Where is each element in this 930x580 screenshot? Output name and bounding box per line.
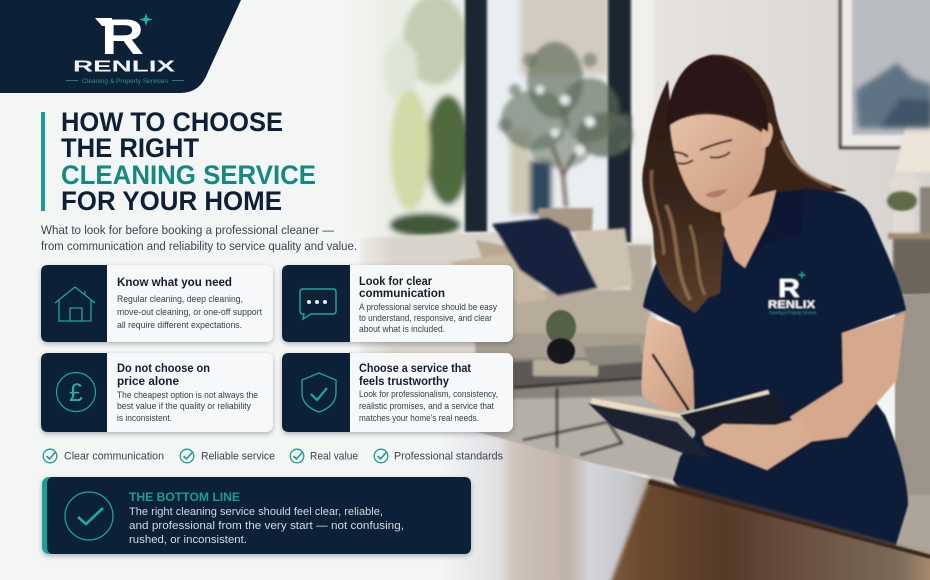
vase plant <box>546 310 576 364</box>
side cabinet <box>888 233 930 295</box>
side plant <box>887 191 917 234</box>
wall art <box>839 0 930 149</box>
card text: matches your home's real needs. <box>359 413 479 424</box>
logo wordmark: RENLIX <box>73 58 176 76</box>
notebook <box>588 390 788 457</box>
armchair <box>895 293 930 560</box>
callout text: and professional from the very start — not confusing, <box>129 520 404 532</box>
pen <box>653 355 688 409</box>
hair back <box>660 55 847 225</box>
left arm <box>642 317 697 414</box>
check: real value: Real value <box>310 450 358 462</box>
olive tree <box>498 42 633 207</box>
card text <box>359 274 497 335</box>
logo tagline: Cleaning & Property Services <box>82 78 168 85</box>
subtitle: What to look for before booking a professional cleaner — <box>41 223 335 237</box>
wooden table foreground <box>345 396 930 580</box>
panel: do not choose on price alone <box>41 353 273 432</box>
card text: Do not choose on <box>117 361 210 375</box>
card text: Look for professionalism, consistency, <box>359 389 498 400</box>
subtitle <box>41 223 357 253</box>
card text: feels trustworthy <box>359 374 449 388</box>
logo tagline <box>66 78 184 85</box>
callout text: THE BOTTOM LINE <box>129 492 240 504</box>
shirt logo: R <box>778 273 800 303</box>
panel: look for clear communication <box>282 265 513 342</box>
title block: THE RIGHT <box>61 133 199 163</box>
hair highlights <box>651 140 832 300</box>
icon: pound coin <box>56 372 96 412</box>
shirt logo: Cleaning & Property Services <box>769 310 817 315</box>
card text: price alone <box>117 374 179 388</box>
art mountains <box>856 63 930 128</box>
card text: best value if the quality or reliability <box>117 401 251 412</box>
icon: check circle <box>65 492 113 540</box>
check: reliable service <box>180 449 275 463</box>
rug <box>470 358 695 485</box>
logo sparkle <box>139 13 153 26</box>
logo panel <box>0 0 241 93</box>
card text <box>117 361 258 424</box>
photo: living room background <box>340 0 930 560</box>
card text <box>359 361 498 424</box>
check: clear communication: Clear communication <box>64 450 164 462</box>
title block: CLEANING SERVICE <box>61 160 316 190</box>
face <box>670 115 773 212</box>
panel: know what you need <box>41 265 273 342</box>
hand over book <box>702 418 812 470</box>
subtitle: from communication and reliability to service quality and value. <box>41 239 357 253</box>
panel: choose a service that feels trustworthy <box>282 353 513 432</box>
left white fade over photo <box>0 0 395 580</box>
title block <box>41 107 316 216</box>
photo: woman writing in notebook <box>588 55 908 548</box>
check: real value <box>290 449 358 463</box>
checklist row <box>43 449 503 463</box>
card text: about what is included. <box>359 324 445 335</box>
card text: Choose a service that <box>359 361 471 375</box>
tree pot <box>538 208 593 232</box>
icon: house <box>55 287 95 321</box>
card text: is inconsistent. <box>117 413 172 424</box>
check: professional standards: Professional standards <box>394 450 503 462</box>
callout text: The right cleaning service should feel clear, reliable, <box>129 506 383 518</box>
card text: all require different expectations. <box>117 320 242 331</box>
card text: Know what you need <box>117 275 232 289</box>
card text: realistic promises, and a service that <box>359 401 494 412</box>
callout: the bottom line <box>42 477 471 554</box>
shirt logo <box>768 272 817 315</box>
icon: shield check <box>302 373 336 412</box>
collar <box>743 189 804 272</box>
logo mark R: R <box>101 9 144 65</box>
card text: move-out cleaning, or one-off support <box>117 307 262 318</box>
card text: The cheapest option is not always the <box>117 390 258 401</box>
card text: to understand, responsive, and clear <box>359 313 493 324</box>
lamp <box>889 120 930 233</box>
hair over shoulder <box>642 80 725 313</box>
check: reliable service: Reliable service <box>201 450 275 462</box>
title block: HOW TO CHOOSE <box>61 107 283 137</box>
card text <box>117 275 262 331</box>
sofa <box>360 218 660 360</box>
card text: Regular cleaning, deep cleaning, <box>117 294 243 305</box>
neck <box>720 190 776 268</box>
coffee table <box>513 344 645 455</box>
window frames <box>465 0 631 243</box>
title block: FOR YOUR HOME <box>61 186 282 216</box>
callout text: rushed, or inconsistent. <box>129 534 247 546</box>
card text: A professional service should be easy <box>359 302 497 313</box>
card text: Look for clear <box>359 274 432 288</box>
hair crown <box>666 56 768 132</box>
icon: pound coin: £ <box>69 379 83 407</box>
icon: speech bubble <box>300 289 336 319</box>
shirt <box>643 188 908 548</box>
callout text <box>129 492 404 546</box>
card text: communication <box>359 286 445 300</box>
right arm <box>790 313 905 442</box>
shirt logo: RENLIX <box>768 299 816 311</box>
